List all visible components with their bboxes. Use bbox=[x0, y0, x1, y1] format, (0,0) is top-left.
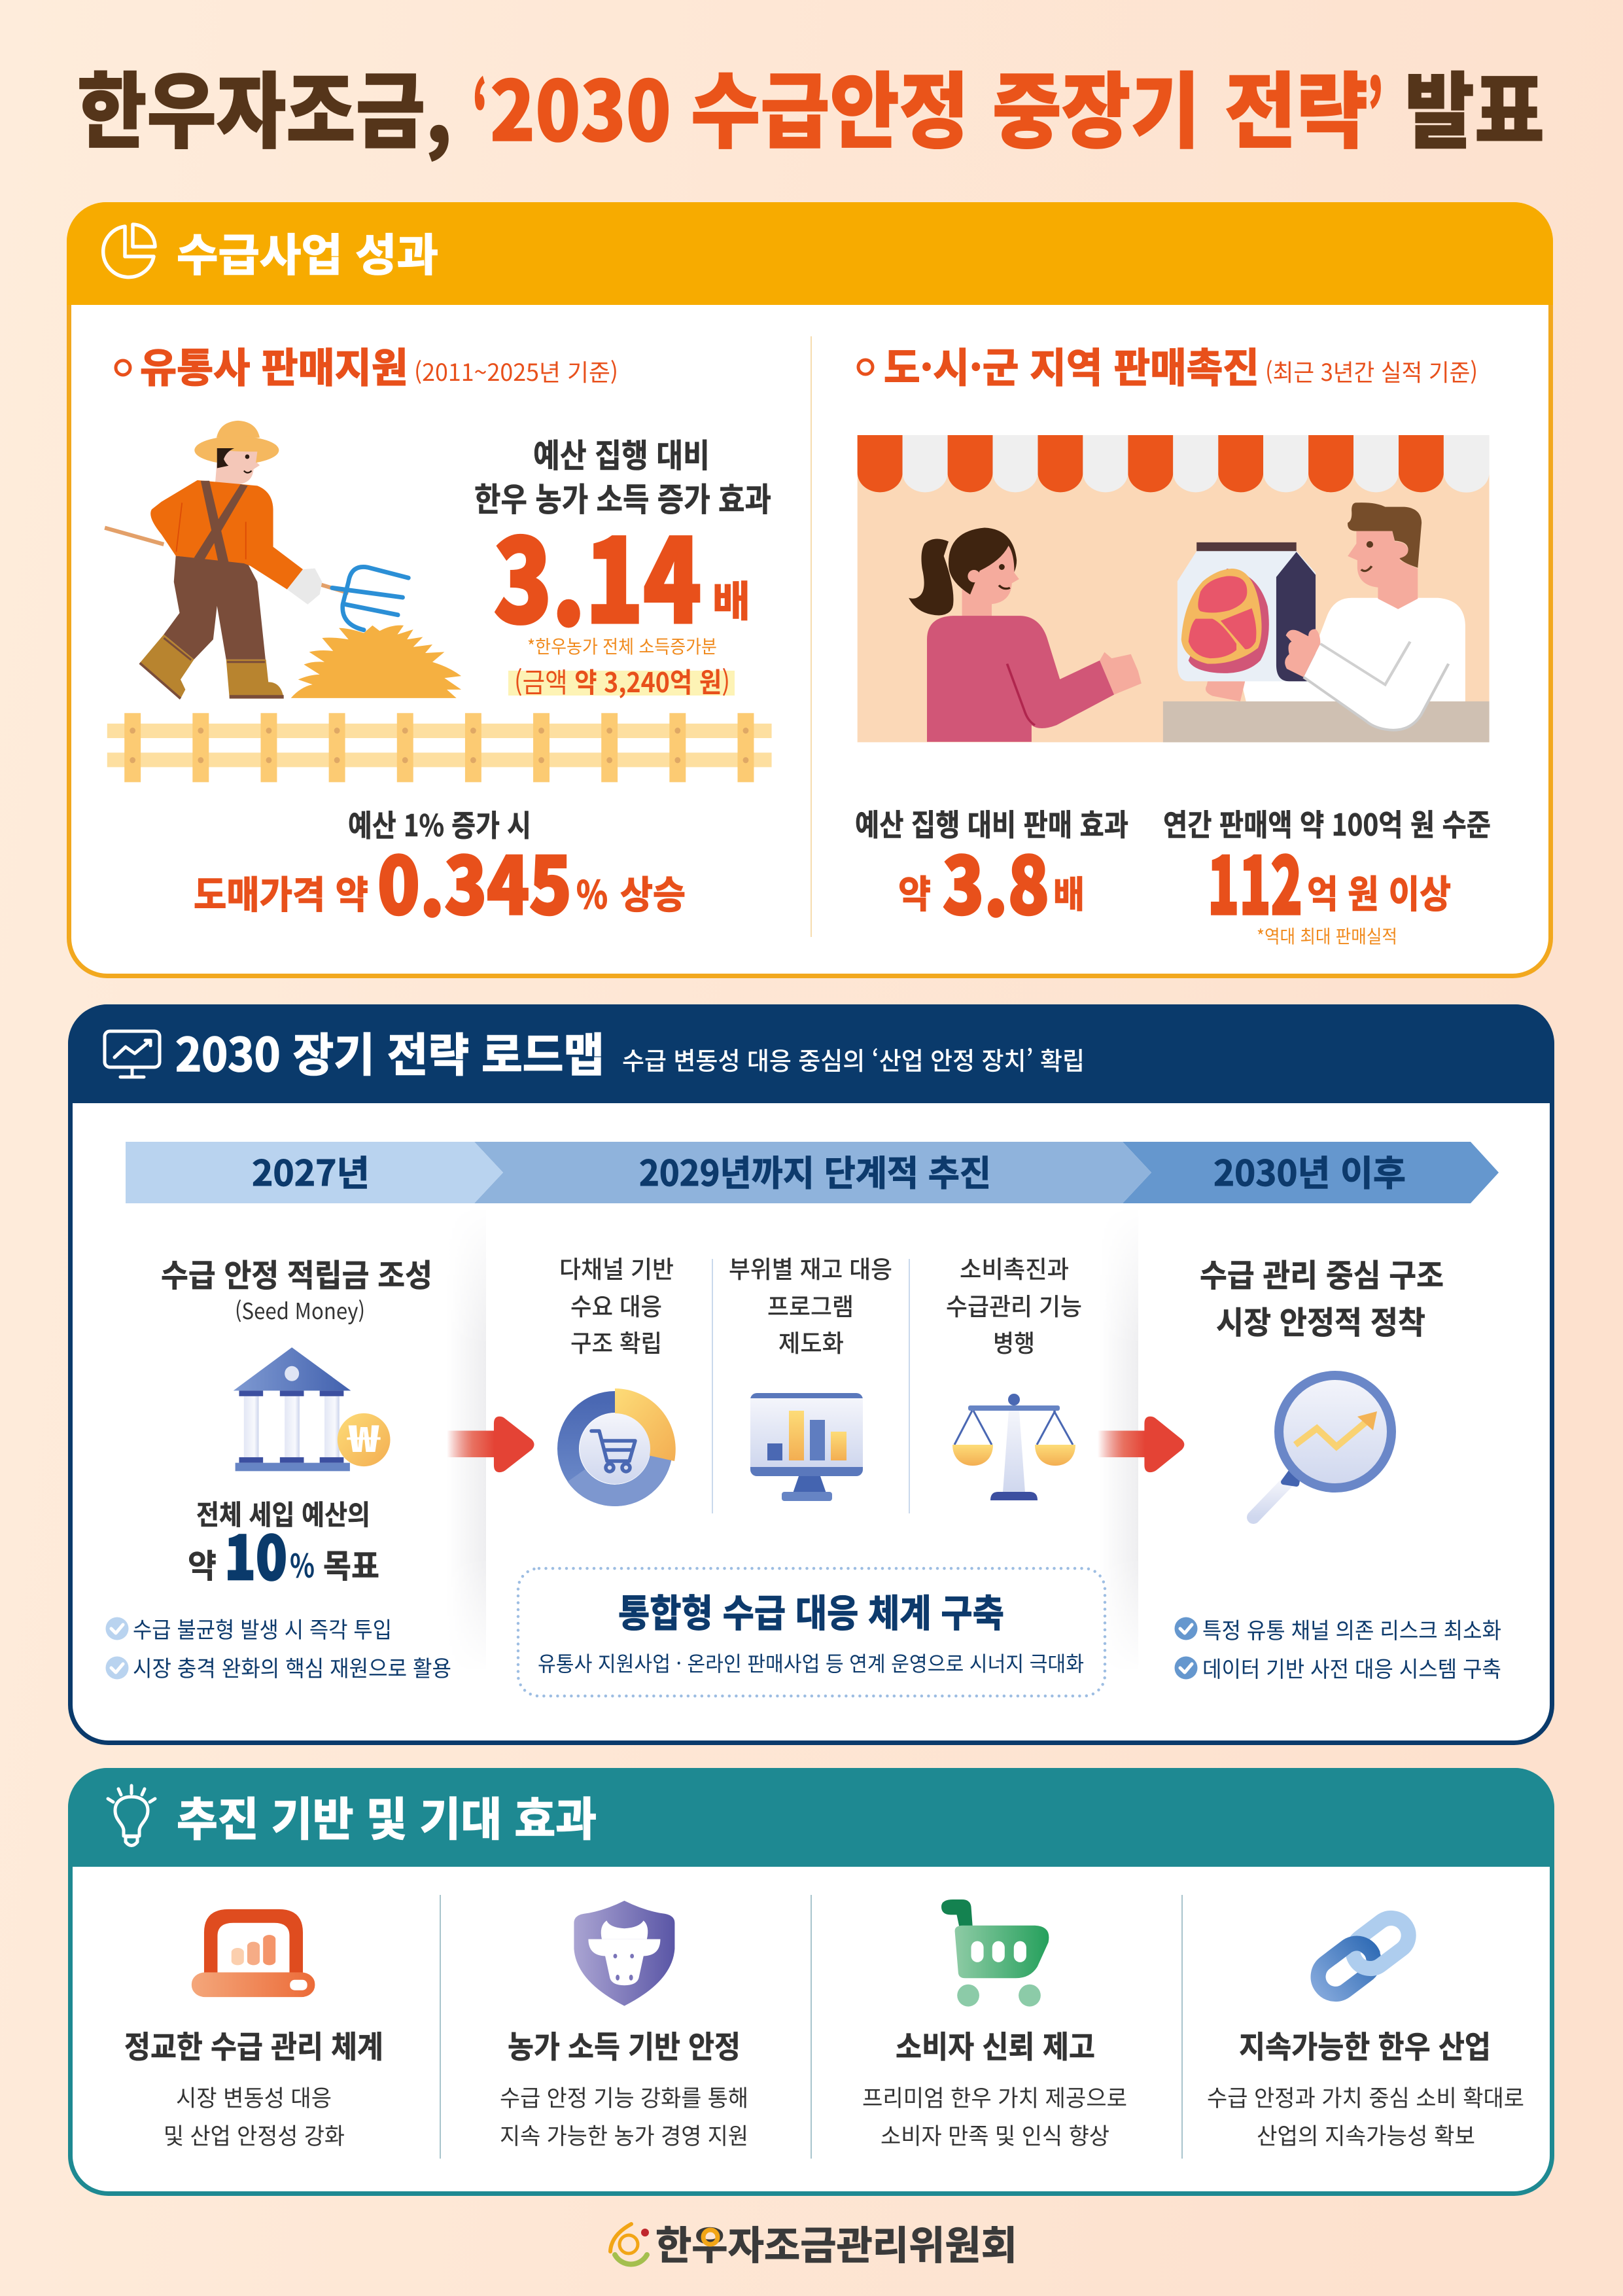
stat: 도매가격 약 0.345% 상승: 상승 bbox=[620, 864, 686, 919]
description: 및 산업 안정성 강화 bbox=[164, 2118, 345, 2151]
timeline: phase chevrons: 2030년 이후 bbox=[1213, 1144, 1406, 1196]
subheading: 유통사 판매지원 bbox=[116, 335, 618, 394]
checklist: 수급 불균형 발생 시 즉각 투입 bbox=[133, 1612, 392, 1644]
step text: 다채널 기반 수요 대응 구조 확립: 구조 확립 bbox=[570, 1324, 662, 1359]
text: 예산 1% 증가 시: 예산 1% 증가 시 bbox=[348, 802, 531, 845]
title: 소비자 신뢰 제고 bbox=[896, 2022, 1095, 2067]
panel: 수급사업 성과 bbox=[67, 202, 1553, 976]
timeline: phase chevrons bbox=[126, 1142, 1499, 1203]
stat: 3.14배: 배 bbox=[712, 569, 750, 629]
step text: 소비촉진과 수급관리 기능 병행 bbox=[946, 1250, 1082, 1359]
column: 농가 소득 기반 안정 bbox=[500, 1901, 748, 2151]
column: 지속가능한 한우 산업 bbox=[1207, 1911, 1524, 2151]
description: 수급 안정 기능 강화를 통해 bbox=[500, 2080, 748, 2113]
title: ‘ bbox=[472, 46, 488, 165]
stat: 약 10% 목표: 10 bbox=[224, 1510, 287, 1597]
icon: monitor with chart bbox=[105, 1031, 160, 1077]
step text: 소비촉진과 수급관리 기능 병행: 소비촉진과 bbox=[960, 1250, 1069, 1285]
stat: 3.14배: 3.14 bbox=[494, 490, 701, 656]
stat: 약 3.8배: 배 bbox=[1053, 866, 1085, 919]
woman customer bbox=[909, 528, 1142, 742]
icon: balance scale bbox=[952, 1394, 1075, 1500]
step text: 다채널 기반 수요 대응 구조 확립: 수요 대응 bbox=[570, 1287, 662, 1322]
description bbox=[1207, 2080, 1524, 2151]
icon: chain links bbox=[1311, 1911, 1416, 2001]
title: 2030 bbox=[490, 46, 671, 165]
description: 프리미엄 한우 가치 제공으로 bbox=[862, 2080, 1127, 2113]
checklist: 특정 유통 채널 의존 리스크 최소화 bbox=[1202, 1613, 1501, 1645]
step text: 다채널 기반 수요 대응 구조 확립 bbox=[559, 1250, 674, 1359]
description: 수급 안정과 가치 중심 소비 확대로 bbox=[1207, 2080, 1524, 2113]
heading: 2030 장기 전략 로드맵: 2030 장기 전략 로드맵 bbox=[175, 1019, 604, 1085]
stat: 112억 원 이상: 112 bbox=[1208, 823, 1302, 937]
stat: 약 3.8배: 약 bbox=[898, 864, 931, 919]
step text: 소비촉진과 수급관리 기능 병행: 수급관리 기능 bbox=[946, 1287, 1082, 1322]
column: 2029 steps bbox=[518, 1250, 1105, 1696]
subheading: 도·시·군 지역 판매촉진: (최근 3년간 실적 기준) bbox=[1265, 354, 1478, 388]
text: 예산 집행 대비: 예산 집행 대비 bbox=[533, 430, 710, 477]
icon: bank with won coin: ₩ bbox=[346, 1410, 381, 1463]
illustration: farmer with pitchfork bbox=[105, 421, 461, 699]
illustration: butcher shop scene bbox=[858, 435, 1490, 742]
text: 예산 집행 대비 판매 효과: 예산 집행 대비 판매 효과 bbox=[855, 802, 1128, 845]
stat: 도매가격 약 0.345% 상승 bbox=[194, 823, 686, 937]
text: 전체 세입 예산의: 전체 세입 예산의 bbox=[196, 1493, 370, 1533]
text: 연간 판매액 약 100억 원 수준: 연간 판매액 약 100억 원 수준 bbox=[1163, 802, 1491, 845]
icon: shield with cow bbox=[574, 1901, 674, 2006]
description: 지속 가능한 농가 경영 지원 bbox=[500, 2118, 748, 2151]
subtitle: 산업 안정 장치: 수급 변동성 대응 중심의 ‘산업 안정 장치’ 확립 bbox=[622, 1041, 1085, 1077]
stat: 112억 원 이상 bbox=[1208, 823, 1451, 937]
icon: shopping cart bbox=[941, 1899, 1049, 2007]
stat: 도매가격 약 0.345% 상승: 도매가격 약 bbox=[194, 864, 368, 919]
callout: 통합형 수급 대응 체계 구축 bbox=[518, 1568, 1105, 1696]
title: ’ bbox=[1367, 46, 1384, 165]
icon: magnifier with trend arrow bbox=[1253, 1375, 1391, 1517]
heading: 수급 관리 중심 구조 bbox=[1200, 1250, 1444, 1343]
column: 소비자 신뢰 제고 bbox=[862, 1899, 1127, 2151]
description bbox=[862, 2080, 1127, 2151]
stat: 약 10% 목표 bbox=[188, 1510, 379, 1597]
title bbox=[77, 46, 1544, 165]
step text: 부위별 재고 대응 프로그램 제도화: 제도화 bbox=[778, 1324, 844, 1359]
stat: 도매가격 약 0.345% 상승: 0.345 bbox=[377, 823, 572, 937]
description bbox=[164, 2080, 345, 2151]
title: 발표 bbox=[1405, 46, 1544, 165]
heading: 수급 관리 중심 구조: 수급 관리 중심 구조 bbox=[1200, 1250, 1444, 1296]
checklist bbox=[106, 1612, 451, 1683]
icon: monitor with bar chart bbox=[750, 1393, 863, 1501]
stat: 112억 원 이상: 억 원 이상 bbox=[1307, 864, 1451, 919]
note: 한우농가 전체 소득증가분: *한우농가 전체 소득증가분 bbox=[527, 633, 717, 659]
icon: light bulb bbox=[108, 1786, 155, 1845]
text: Seed Money: (Seed Money) bbox=[235, 1294, 365, 1326]
column: 정교한 수급 관리 체계 bbox=[124, 1909, 383, 2151]
arrow: 2029 to 2030 bbox=[1098, 1417, 1184, 1472]
heading: 수급사업 성과: 수급사업 성과 bbox=[177, 219, 438, 284]
description bbox=[500, 2080, 748, 2151]
butcher arm bbox=[1285, 629, 1448, 730]
timeline: phase chevrons: 2029년까지 단계적 추진 bbox=[639, 1144, 991, 1196]
timeline: phase chevrons: 2027년 bbox=[252, 1144, 370, 1196]
title: 중장기 bbox=[992, 46, 1200, 165]
title: 지속가능한 한우 산업 bbox=[1239, 2022, 1491, 2067]
illustration: wooden fence bbox=[107, 713, 772, 782]
footer logo: 한우자조금관리위원회 bbox=[655, 2214, 1017, 2271]
step text: 부위별 재고 대응 프로그램 제도화 bbox=[729, 1250, 892, 1359]
heading: 수급 안정 적립금 조성: 수급 안정 적립금 조성 bbox=[161, 1250, 432, 1296]
description: 산업의 지속가능성 확보 bbox=[1257, 2118, 1475, 2151]
description: 시장 변동성 대응 bbox=[176, 2080, 332, 2113]
text: 예산 집행 대비: 한우 농가 소득 증가 효과 bbox=[474, 474, 771, 521]
icon: donut chart with cart bbox=[568, 1388, 676, 1496]
title: 전략 bbox=[1225, 46, 1368, 165]
column: 2030 이후 bbox=[1175, 1250, 1501, 1684]
checklist: 데이터 기반 사전 대응 시스템 구축 bbox=[1202, 1651, 1501, 1684]
panel: 추진 기반 및 기대 효과 bbox=[68, 1768, 1554, 2193]
subheading: 유통사 판매지원: 유통사 판매지원 bbox=[140, 335, 408, 394]
title: 정교한 수급 관리 체계 bbox=[124, 2022, 383, 2067]
title: 농가 소득 기반 안정 bbox=[508, 2022, 741, 2067]
subheading: 도·시·군 지역 판매촉진: 도·시·군 지역 판매촉진 bbox=[884, 335, 1259, 394]
step text: 소비촉진과 수급관리 기능 병행: 병행 bbox=[993, 1324, 1035, 1359]
checklist bbox=[1175, 1613, 1501, 1684]
icon: pie chart bbox=[103, 224, 155, 277]
shop counter bbox=[1163, 701, 1490, 742]
icon: bank with won coin bbox=[234, 1347, 391, 1471]
step text: 부위별 재고 대응 프로그램 제도화: 부위별 재고 대응 bbox=[729, 1250, 892, 1285]
step text: 다채널 기반 수요 대응 구조 확립: 다채널 기반 bbox=[559, 1250, 674, 1285]
callout: 통합형 수급 대응 체계 구축: 통합형 수급 대응 체계 구축 bbox=[618, 1583, 1004, 1638]
note: 역대 최대 판매실적: *역대 최대 판매실적 bbox=[1257, 923, 1397, 949]
stat: 약 10% 목표: 목표 bbox=[323, 1540, 379, 1587]
stat: 약 3.8배 bbox=[898, 823, 1085, 937]
meat package bbox=[1178, 542, 1316, 681]
title: 한우자조금, bbox=[77, 46, 452, 165]
stat: 도매가격 약 0.345% 상승: % bbox=[576, 864, 608, 919]
heading: 수급 관리 중심 구조: 시장 안정적 정착 bbox=[1216, 1297, 1425, 1343]
description: 소비자 만족 및 인식 향상 bbox=[881, 2118, 1109, 2151]
heading: 추진 기반 및 기대 효과: 추진 기반 및 기대 효과 bbox=[177, 1783, 597, 1849]
text: 예산 집행 대비 bbox=[474, 430, 771, 521]
checklist: 시장 충격 완화의 핵심 재원으로 활용 bbox=[133, 1651, 451, 1683]
column: 2027년 적립금 bbox=[106, 1250, 451, 1683]
subheading: 도·시·군 지역 판매촉진 bbox=[858, 335, 1478, 394]
stat: 약 10% 목표: % bbox=[290, 1540, 315, 1587]
panel: 2030 장기 전략 로드맵 bbox=[68, 1004, 1554, 1743]
callout: 통합형 수급 대응 체계 구축: 유통사 지원사업 · 온라인 판매사업 등 연계 운영으로 시너지 극대화 bbox=[538, 1648, 1084, 1678]
arrow: 2027 to 2029 bbox=[447, 1417, 534, 1472]
subheading: 유통사 판매지원: (2011~2025년 기준) bbox=[414, 354, 618, 388]
title: 수급안정 bbox=[691, 46, 969, 165]
step text: 부위별 재고 대응 프로그램 제도화: 프로그램 bbox=[767, 1287, 854, 1322]
stat: 약 3.8배: 3.8 bbox=[943, 823, 1049, 937]
butcher bbox=[1206, 503, 1465, 701]
stat: 약 10% 목표: 약 bbox=[188, 1540, 217, 1587]
callout: 금액 약 3,240억 원: (금액 약 3,240억 원) bbox=[514, 661, 730, 701]
icon: laptop bbox=[192, 1909, 315, 1997]
